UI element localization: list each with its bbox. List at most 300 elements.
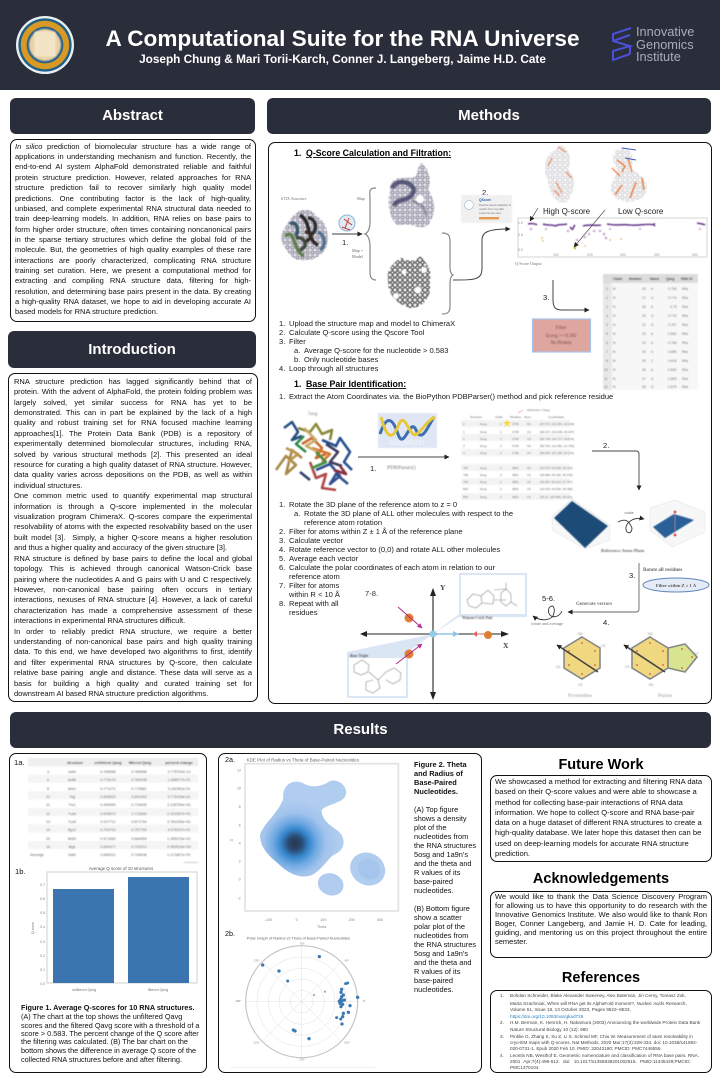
table: Q-score per residue: N: [613, 368, 616, 372]
label: 2b: 2b.: [225, 929, 235, 938]
table: Q-score per residue: Rbs: [682, 341, 688, 345]
table: atom coordinates: Residue: [510, 415, 521, 419]
caption: figure 2: the RNA structures: [414, 841, 476, 850]
table: atom coordinates: 2: [500, 451, 502, 455]
heading: Base Pair Identification: Base Pair Identification:: [306, 379, 406, 389]
figure: pyrimidine and purine rings: Purine: [658, 693, 673, 699]
chart: average Q score bar chart: [31, 866, 197, 992]
reference list: Pintilie G, Zhang K, Su Z, Li S, Schmid MF, Chiu W. Measurement of atom resolvability in: [510, 1034, 693, 1039]
figure: Qscore tool panel: QScore: [479, 198, 491, 202]
chart: average Q score bar chart: 0.4: [40, 925, 45, 929]
panel: introduction text: approaches[1]. The Protein Data Bank (PDB) is a repository of: [14, 429, 252, 438]
table: atom coordinates: C5: [527, 487, 531, 491]
list: base pair steps: Repeat with all: [289, 599, 339, 608]
table: Q-score per residue: 6: [606, 341, 608, 345]
table: Q-score per residue: 3: [606, 314, 608, 318]
logo: Innovative Genomics Institute: [612, 24, 694, 64]
label: 1a: 1a.: [14, 758, 25, 767]
chart: polar scatter: 90°: [300, 941, 305, 945]
chart: KDE plot: 12: [237, 768, 241, 772]
table: atom coordinates: 5osg: [480, 480, 487, 484]
table: Q-score per residue: 7: [606, 350, 608, 354]
heading: References: References: [562, 970, 640, 986]
chart: average Q score bar chart: 0.2: [40, 954, 45, 958]
caption: figure 1: (A) The chart at the top shows the unfiltered Qavg: [21, 1012, 182, 1021]
chart: KDE plot: 8: [239, 805, 241, 809]
table: Q-score per residue: A: [651, 287, 654, 291]
figure: pyrimidine and purine rings: C4: [625, 665, 629, 669]
list: base pair steps: [279, 500, 513, 617]
heading: Future Work: Future Work: [558, 757, 644, 773]
table: atom coordinates: 2709: [512, 437, 519, 441]
table: Q-score per residue: 0.809: [668, 377, 677, 381]
panel: introduction text: basis for building a high quality and curated training set for: [14, 679, 252, 688]
panel: methods: [268, 142, 712, 704]
caption: figure 2: nucleotides from: [414, 832, 468, 841]
table: Q-score by structure: 8lgs: [69, 845, 76, 849]
table: Q-score by structure: 0.748438: [131, 853, 147, 857]
figure: mmCIF structure with map and model: Model: [352, 254, 364, 259]
figure: filter step and vector generation: [531, 563, 709, 627]
chart: average Q score bar chart: 0.5: [40, 911, 45, 915]
table: Q-score by structure: 5.775428e-01: [168, 795, 190, 799]
table: Q-score by structure: 7us5: [68, 820, 76, 824]
table: atom coordinates: 5osg: [480, 466, 487, 470]
chart: Q-score output plot: 300: [620, 253, 626, 257]
figure: pyrimidine and purine rings: N3: [578, 632, 582, 636]
figure: pyrimidine and purine rings: C4: [556, 665, 560, 669]
Q-score filter box and arrow: [532, 280, 590, 352]
caption: figure 2: and the theta and: [414, 859, 472, 868]
table: Q-score by structure: 0.490000: [100, 803, 116, 807]
list: base pair steps: Calculate the polar coordinates of each atom in relation to our: [289, 563, 495, 572]
figure: Qscore tool panel: [461, 188, 512, 223]
caption: figure 2: nucleotides from: [414, 931, 468, 940]
chart: Q-score output plot: 1.0: [518, 221, 523, 225]
chart: KDE plot: -2: [237, 897, 241, 901]
chart: Q-score output plot: 0.5: [518, 233, 523, 237]
table: atom coordinates: C6: [527, 495, 531, 499]
reference list: Leontis NB, Westhof E. Geometric nomenclature and classification of RNA base pairs. RNA.: [510, 1053, 699, 1058]
heading: Methods: [267, 98, 711, 134]
table: Q-score per residue: G: [651, 314, 654, 318]
table: Q-score per residue: 16: [642, 287, 646, 291]
reference list: 4.: [500, 1053, 504, 1058]
reference list: 3.: [500, 1034, 504, 1039]
figure: Qscore tool panel: experimental maps: [479, 211, 502, 215]
list: base pair steps: 8.: [279, 599, 285, 608]
table: Q-score per residue: 20: [642, 314, 646, 318]
panel: introduction text: One common metric used to quantify experimental map structural: [14, 491, 252, 500]
caption: figure 2: base-paired: [414, 976, 453, 985]
chart: KDE plot: 0: [239, 878, 241, 882]
caption: figure 2: nucleotides.: [414, 985, 453, 994]
table: Q-score per residue: Rbs: [682, 296, 688, 300]
table: atom coordinates: 796: [463, 466, 468, 470]
table: Q-score per residue: RNA ID: [681, 277, 693, 281]
panel: figure 2: [218, 753, 482, 1073]
figure: filter step and vector generation: Generate vectors: [576, 602, 612, 607]
table: atom coordinates: 2851: [512, 487, 519, 491]
table: Q-score by structure: 0.757794: [131, 828, 147, 832]
table: atom coordinates: 2: [500, 480, 502, 484]
figure: mmCIF structure with map and model: 1.: [342, 238, 348, 247]
title: A Computational Suite for the RNA Universe: [105, 26, 580, 51]
figure: filter step and vector generation: 5-6.: [542, 594, 555, 603]
chart: polar scatter: Polar Graph of Radius vs Theta of Base-Paired Nucleotides: [247, 936, 350, 941]
table: Q-score by structure: 4.078037e-01: [168, 828, 190, 832]
table: Q-score by structure: 9.065516e+00: [167, 845, 191, 849]
table: Q-score per residue: Rbs: [682, 323, 688, 327]
table: Q-score by structure: 10: [46, 795, 50, 799]
list: base pair steps: 4.: [279, 545, 285, 554]
table: atom coordinates: C2: [527, 430, 531, 434]
table: atom coordinates: 2709: [512, 430, 519, 434]
chart: polar scatter: 270°: [299, 1057, 306, 1061]
table: atom coordinates: N1: [527, 422, 531, 426]
list: Q-score steps: 4.: [279, 364, 285, 373]
caption: figure 1: scores and the filtered Qavg score with a threshold of a: [21, 1021, 200, 1030]
heading: Acknowledgements: Acknowledgements: [533, 871, 669, 887]
caption: figure 2: and the theta and: [414, 958, 472, 967]
panel: future work text: We showcased a method for extracting and filtering RNA data: [495, 777, 702, 786]
figure: filter step and vector generation: 3.: [629, 571, 635, 580]
chart: KDE plot: 6: [239, 823, 241, 827]
reference list: PMC1370104.: [510, 1065, 540, 1070]
table: Q-score per residue: 0.830: [668, 368, 677, 372]
panel: introduction text: relative base pairing angle and distance. These data will serve as a: [14, 668, 252, 677]
table: Q-score by structure: filtered Qavg: [129, 761, 151, 765]
table: atom coordinates: 5osg: [480, 495, 487, 499]
chart: polar axes with base pair vectors: [347, 573, 527, 700]
figure: reference atom plane rotation: rotate: [624, 510, 634, 515]
table: Q-score per residue: N: [613, 296, 616, 300]
table: Q-score per residue: U: [651, 296, 654, 300]
panel: introduction text: resolvability of atoms with the expected resolvability based on the user: [14, 522, 252, 531]
table: atom coordinates: [24.975, 65.509, 34.154]: [540, 466, 573, 470]
panel: future work text: method for collecting base-pair interactions of RNA data: [495, 798, 683, 807]
table: atom coordinates: C5: [527, 480, 531, 484]
panel: future work text: [490, 775, 712, 862]
panel: introduction text: characterization has made a comprehensive assessment of these: [14, 606, 252, 615]
table: Q-score per residue: N: [613, 359, 616, 363]
list: base pair steps: 5.: [279, 554, 285, 563]
table: atom coordinates: 5osg: [480, 422, 487, 426]
chart: Q-score output plot: 0.0: [518, 248, 523, 252]
figure: pyrimidine and purine rings: N1: [649, 683, 653, 687]
table: atom coordinates: 799: [463, 480, 468, 484]
reference list: cryo-EM maps with Q-scores. Nat Methods. 2020 Mar;17(3):328-334. doi: 10.1038/s41592-: [510, 1040, 698, 1045]
panel: references: [490, 990, 712, 1073]
heading: Abstract: Abstract: [102, 107, 163, 124]
table: Q-score per residue: Number: [629, 277, 642, 281]
table: atom coordinates: Structure: [470, 415, 483, 419]
table: Q-score by structure: unfiltered Qavg: [94, 761, 122, 765]
panel: figure 1: [9, 753, 207, 1073]
caption: figure 2: Figure 2. Theta: [414, 760, 467, 769]
list: base pair steps: within R < 10 Å: [288, 590, 341, 599]
figure: reference atom plane rotation: [552, 499, 705, 553]
figure: mmCIF structure with map and model: Map: [357, 196, 365, 201]
panel: introduction text: RNA structure is defined by base pairs to define the local and global: [14, 554, 252, 563]
text: extract atom coordinates: 1.: [279, 392, 285, 401]
table: Q-score by structure: 1a9n: [68, 770, 76, 774]
list: base pair steps: 6.: [279, 563, 285, 572]
logo: Innovative Genomics Institute: Innovative: [636, 24, 694, 39]
figure: pyrimidine and purine rings: N7: [694, 652, 698, 656]
table: atom coordinates: [67.573, 113.361, 20.339]: [540, 422, 574, 426]
table: Q-score by structure: 1.688077e-01: [168, 778, 190, 782]
table: Q-score by structure: 8h63: [68, 837, 76, 841]
table: Q-score by structure: 0.690477: [100, 845, 116, 849]
chart: Q-score output plot: 100: [553, 253, 559, 257]
table: Q-score by structure: 0.710639: [131, 803, 147, 807]
table: Q-score by structure: 3: [47, 770, 49, 774]
caption: figure 2: 5osg and 1a9n's: [414, 949, 468, 958]
table: Q-score per residue: 25: [642, 359, 646, 363]
list: Q-score steps: [279, 319, 455, 373]
caption: figure 2: show a scatter: [414, 913, 462, 922]
callout: base triple: [347, 634, 433, 698]
table: Q-score per residue: 0.818: [668, 359, 677, 363]
text: extract atom coordinates: Extract the Atom Coordinates via. the BioPython PDBParser() method and pick reference residue: [289, 392, 613, 401]
panel: acknowledgements text: semester.: [495, 937, 528, 946]
table: atom coordinates: 5osg: [480, 473, 487, 477]
table: atom coordinates: 2: [500, 444, 502, 448]
table: Q-score per residue: N: [613, 287, 616, 291]
label: 1b: 1b.: [15, 867, 26, 876]
panel: abstract text: interactions are poorly characterized, complicating RNA structure: [15, 256, 251, 265]
list: Q-score steps: a.: [294, 346, 300, 355]
panel: acknowledgements text: guiding, and mentoring us on this project throughout the entire: [495, 928, 707, 937]
table: Q-score per residue: Rbs: [682, 305, 688, 309]
table: Q-score per residue: 0.75: [670, 305, 677, 309]
caption: figure 2: Base-Paired: [414, 778, 457, 787]
table: Q-score per residue: G: [651, 350, 654, 354]
panel: introduction text: visualization program ChimeraX. Q-scores compare the experimental: [14, 512, 252, 521]
table: Q-score per residue: 12: [604, 385, 608, 389]
table: Q-score per residue: G: [651, 377, 654, 381]
list: base pair steps: 7.: [279, 581, 285, 590]
table: atom coordinates: [25.986, 65.330, 36.470]: [540, 473, 573, 477]
figure: filter step and vector generation: Rotate all residues: [643, 568, 682, 573]
caption: figure 1: collected RNA structures before and after filtering.: [21, 1055, 182, 1064]
table: Q-score per residue: 4: [606, 323, 608, 327]
table: Q-score per residue: Chain: [613, 277, 622, 281]
chart: Q-score output plot: 500: [692, 253, 698, 257]
chart: KDE plot: 200: [349, 918, 355, 922]
table: Q-score by structure: 0.700312: [131, 845, 147, 849]
figure: Qscore tool panel: 2.: [482, 188, 488, 197]
table: Q-score by structure: 0.766958: [100, 770, 116, 774]
table: atom coordinates: 2851: [512, 473, 519, 477]
caption: figure 2: R values of its: [414, 967, 461, 976]
heading: Results: Results: [333, 721, 388, 738]
panel: future work text: information. We hope to collect Q-score and RNA base-pair: [495, 808, 695, 817]
callout: Watson-Crick pair: [433, 573, 527, 634]
table: atom coordinates: [65.748, 114.717, 20.816]: [540, 437, 574, 441]
table: Q-score per residue: A: [651, 305, 654, 309]
list: Q-score steps: Average Q-score for the nucleotide > 0.583: [304, 346, 448, 355]
Q-score filter box and arrow: Filter: [556, 326, 567, 331]
table: Q-score by structure: 0.711806: [131, 812, 147, 816]
table: Q-score by structure: 2.775702e-14: [168, 770, 190, 774]
reference list: Volume 51, Issue 18, 13 October 2023, Pages 9522–9533,: [510, 1007, 631, 1012]
table: Q-score per residue: Rbs: [682, 350, 688, 354]
arrow: PDBParser step: [358, 457, 449, 473]
table: Q-score per residue: 18: [642, 305, 646, 309]
table: Q-score by structure: 8: [47, 787, 49, 791]
table: Q-score per residue: 17: [642, 296, 646, 300]
heading: Introduction: [8, 331, 256, 368]
table: Q-score per residue: N: [613, 385, 616, 389]
panel: introduction text: largely solved, yet similar success for RNA has yet to be: [14, 398, 252, 407]
chart: average Q score bar chart: unfiltered Qavg: [72, 988, 96, 992]
chart: polar axes with base pair vectors: 7-8.: [365, 589, 378, 598]
list: base pair steps: 2.: [279, 527, 285, 536]
panel: abstract text: In silico prediction of biomolecular structure has a wide range of: [15, 142, 251, 151]
list: base pair steps: 3.: [279, 536, 285, 545]
panel: introduction text: experimentally determined biomolecular structures, including RNA,: [14, 439, 252, 448]
panel: introduction text: and thus a higher quality and accuracy of the given structure [3].: [14, 543, 227, 552]
panel: abstract text: unbiased, and complete experimental RNA structural data needed to: [15, 204, 251, 213]
panel: introduction text: built model [3]. Simply, a higher Q-score means a higher resolution: [14, 533, 252, 542]
chart: average Q score bar chart: 0.6: [40, 897, 45, 901]
callout: Watson-Crick pair: Watson-Crick Pair: [462, 616, 493, 620]
panel: introduction text: topology. This is achieved through canonical Watson-Crick base: [14, 564, 252, 573]
panel: introduction text: data. To this end, we have developed two algorithms to first, identify: [14, 647, 252, 656]
table: Q-score by structure: 0.826603: [100, 795, 116, 799]
table: atom coordinates: [24.235, 64.530, 38.186]: [540, 487, 573, 491]
table: atom coordinates: 2: [500, 466, 502, 470]
table: Q-score by structure: 3.162361e-01: [168, 787, 190, 791]
table: atom coordinates: 800: [463, 495, 468, 499]
chart: Q-score output plot: [515, 208, 707, 266]
table: Q-score per residue: 22: [642, 332, 646, 336]
panel: acknowledgements text: Boger, Conner Langeberg, and Jamie H. D. Cate for leading,: [495, 919, 707, 928]
chart: KDE plot: R: [230, 839, 233, 843]
table: atom coordinates: 5osg: [480, 430, 487, 434]
logo: UC seal: [16, 16, 74, 74]
list: Q-score steps: Loop through all structures: [289, 364, 379, 373]
chart: polar scatter: 225°: [254, 1041, 261, 1045]
caption: figure 2: polar plot of the: [414, 922, 465, 931]
table: Q-score by structure: 11: [46, 803, 50, 807]
table: Q-score per residue: N: [613, 305, 616, 309]
table: Q-score per residue: Name: [650, 277, 659, 281]
table: Q-score by structure: percent change: [165, 761, 193, 765]
heading: Q-Score Calculation and Filtration: 1.: [294, 148, 301, 158]
panel: abstract text: based models for RNA structure prediction.: [15, 307, 158, 316]
chart: KDE plot: 4: [239, 841, 241, 845]
table: Q-score per residue: 0.767: [668, 323, 677, 327]
table: Q-score by structure: 12: [46, 812, 50, 816]
panel: introduction text: quality and robust training set for RNA focused machine learning: [14, 418, 252, 427]
table: Q-score by structure: 0.671794: [131, 820, 147, 824]
table: Q-score by structure: 8u8k: [68, 778, 76, 782]
table: atom coordinates: 3: [463, 444, 465, 448]
figure: pyrimidine and purine rings: C2: [601, 644, 605, 648]
table: atom coordinates: 800: [463, 487, 468, 491]
list: base pair steps: a.: [294, 509, 300, 518]
chart: KDE plot: Theta: [317, 925, 327, 929]
list: Q-score steps: Filter: [289, 337, 306, 346]
panel: introduction text: In order to reliably predict RNA structure, we require a better: [14, 627, 252, 636]
table: atom coordinates: reference = 5osg: [527, 408, 550, 412]
table: atom coordinates: [26.597, 65.210, 37.707]: [540, 480, 573, 484]
list: base pair steps: Rotate the 3D plane of the reference atom to z = 0: [289, 500, 457, 509]
table: atom coordinates: 2851: [512, 466, 519, 470]
table: Q-score per residue: Rbs: [682, 368, 688, 372]
panel: acknowledgements text: [490, 891, 712, 958]
panel: introduction text: interactions in experimental RNA structures difficult.: [14, 616, 185, 625]
table: atom coordinates: [66.004, 111.196, 20.104]: [540, 451, 574, 455]
table: Q-score by structure: 3.781030e+01: [167, 820, 191, 824]
figure: high and low Q-score molecules: Low Q-score: [618, 207, 664, 216]
table: atom coordinates: 2: [500, 473, 502, 477]
panel: future work text: used on deep-learning models for accurate RNA structure: [495, 839, 689, 848]
table: atom coordinates: N4: [527, 466, 531, 470]
figure: Qscore tool panel: models from cryo-EM: [479, 207, 504, 211]
figure: 5osg ribbon structure: 5osg: [308, 412, 318, 417]
arrow: step 2 to rotation: [592, 441, 639, 490]
table: Q-score per residue: Rbs: [682, 287, 688, 291]
table: Q-score by structure: 13: [46, 820, 50, 824]
table: Q-score by structure: 16: [46, 845, 50, 849]
panel: abstract text: applications in understanding mechanism and function. Recently, the: [15, 152, 251, 161]
logo: Innovative Genomics Institute: Genomics: [636, 37, 694, 52]
panel: abstract text: extracting and compiling RNA structure data, filtering for high-: [15, 276, 251, 285]
panel: introduction text: data quality varies across depositions on the PDB, as well as within: [14, 470, 252, 479]
figure: pyrimidine and purine rings: Pyrimidine: [568, 693, 593, 699]
figure: mmCIF structure with map and model: #TIX Structure: [281, 196, 307, 201]
list: base pair steps: Calculate vector: [289, 536, 344, 545]
chart: average Q score bar chart: 0.3: [40, 940, 45, 944]
list: base pair steps: residues: [289, 608, 318, 617]
caption: figure 2: nucleotides.: [414, 886, 453, 895]
chart: average Q score bar chart: 0.1: [40, 968, 45, 972]
table: atom coordinates: 2709: [512, 422, 519, 426]
table: Q-score per residue: 5: [606, 332, 608, 336]
table: Q-score per residue: N: [613, 377, 616, 381]
heading: Methods: Methods: [458, 107, 520, 124]
caption: figure 1: [21, 1003, 200, 1064]
caption: figure 1: bottom shows the difference in average Q score of the: [21, 1046, 196, 1055]
figure: pyrimidine and purine rings: N3: [648, 632, 652, 636]
table: Q-score per residue: 0.855: [668, 350, 677, 354]
panel: abstract text: train deep-learning models. In addition, RNA relies on base pairs to: [15, 214, 251, 223]
table: Q-score by structure: NaN: [68, 853, 76, 857]
table: Q-score by structure: 2.342397e+01: [167, 812, 191, 816]
figure: filter step and vector generation: rotate and average: [531, 621, 563, 626]
heading: Introduction: Introduction: [88, 341, 176, 358]
table: atom coordinates: 2: [463, 437, 465, 441]
panel: abstract text: resolution, and determining base pairs present in the data. By creating: [15, 287, 251, 296]
table: Q-score per residue: Rbs: [682, 377, 688, 381]
table: Q-score per residue: 0: [606, 287, 608, 291]
panel: introduction text: resource for curating a high quality dataset of RNA structure. However,: [14, 460, 252, 469]
caption: figure 2: (A) Top figure: [414, 805, 458, 814]
panel: introduction text: information is through a Q-score implemented in the molecular: [14, 502, 252, 511]
caption: figure 2: shows a density: [414, 814, 467, 823]
Q-score filter box and arrow: No Protein: [551, 341, 572, 346]
table: Q-score per residue: 1: [606, 296, 608, 300]
panel: abstract text: molecule. But, the geometries of high quality examples of these rare: [15, 245, 251, 254]
table: Q-score by structure: 0.754703: [100, 828, 116, 832]
caption: figure 2: R values of its: [414, 868, 461, 877]
table: Q-score by structure: 8gx2: [68, 828, 76, 832]
panel: introduction text: pairing where the nucleotides A and G pairs with U and C respectively.: [14, 575, 252, 584]
